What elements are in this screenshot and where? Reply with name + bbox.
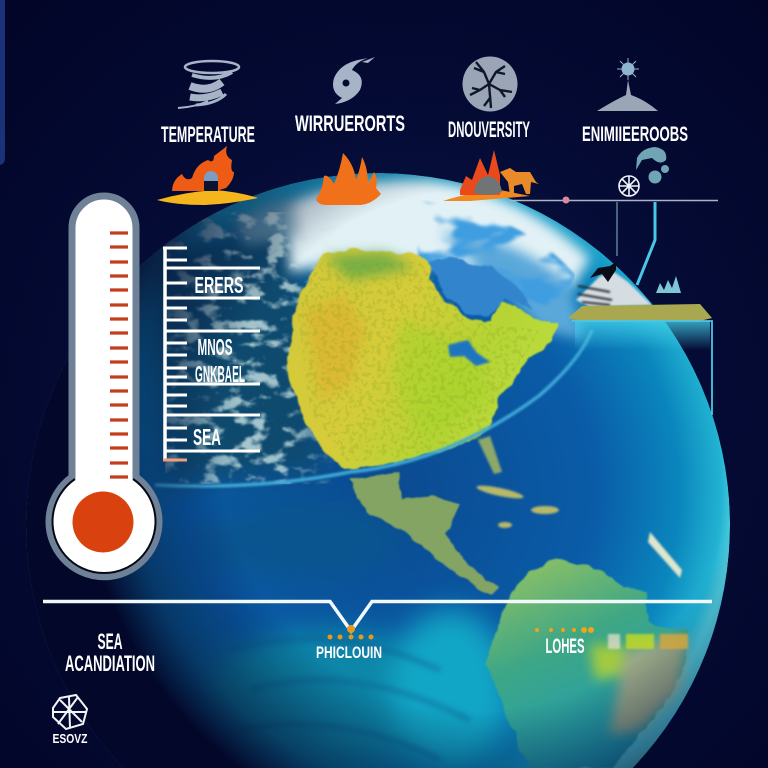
animal silhouette (590, 262, 616, 282)
icon: hurricane (333, 57, 375, 104)
Great Lakes (448, 340, 490, 366)
label: phenomena: PHICLOUIN (316, 643, 382, 662)
south america marker dots (535, 627, 594, 633)
label: errors: ERERS (194, 272, 244, 298)
corner tab (0, 0, 5, 165)
ocean swirl (259, 638, 471, 761)
label: sea: SEA (193, 424, 221, 450)
icon: tornado (178, 61, 239, 108)
cloud texture (165, 212, 340, 484)
bottom labels (65, 625, 688, 676)
notch marker dots (328, 625, 374, 640)
scale ruler: GNKBAEL (195, 361, 245, 387)
label: lowes: LOHES (546, 635, 584, 658)
label: biodiversity: DNOUVERSITY (448, 117, 530, 142)
label: environment: ENIMIIEEROOBS (582, 123, 688, 146)
Hudson Bay (428, 256, 532, 318)
snowy peak (576, 272, 652, 307)
mountain plateau (568, 262, 712, 415)
icon: geodesic emblem (53, 695, 87, 729)
thermometer ticks (110, 233, 128, 477)
label: mass: MNOS (198, 334, 232, 360)
shaded limb (0, 170, 768, 768)
icon: flame on island 1 (157, 146, 258, 205)
South America (487, 558, 688, 768)
color swatches (608, 634, 688, 649)
North America (286, 248, 558, 470)
connector lines (510, 196, 718, 285)
baseline divider with notch (43, 602, 712, 631)
Brazilian highlands (590, 634, 688, 735)
Central America (348, 470, 498, 595)
top row icons and labels (161, 56, 688, 147)
icon: cracked biodiversity disc (462, 56, 518, 112)
icon: volcano with spark (597, 58, 658, 111)
globe (0, 170, 768, 768)
cloud streak (648, 532, 682, 578)
Florida (478, 436, 502, 474)
scale ruler (163, 247, 260, 461)
land speckle (296, 262, 540, 462)
terrain shading (305, 252, 490, 440)
label: sea acidification: SEA (98, 629, 123, 654)
label: temperature: TEMPERATURE (161, 122, 255, 147)
icon: flame 2 (316, 153, 381, 205)
water glow beneath plateau (575, 321, 710, 350)
logo (52, 695, 88, 746)
label: weather events: WIRRUERORTS (295, 111, 405, 136)
thermometer bulb (72, 492, 134, 552)
polar ice (235, 180, 590, 340)
cloud deck base (150, 210, 325, 484)
ruler ticks (163, 248, 260, 451)
water column outline (572, 321, 712, 415)
label: acidification second line: ACANDIATION (65, 651, 155, 676)
ruler base tick (163, 458, 187, 462)
small plants (656, 276, 681, 293)
Caribbean islands (476, 483, 559, 528)
ruler spine (163, 247, 167, 461)
teal southern water (200, 500, 510, 768)
rock streaks (578, 286, 612, 305)
ocean (26, 173, 730, 768)
icon: fire and animal (443, 150, 539, 201)
thermometer case (49, 196, 159, 577)
thermometer (49, 196, 159, 577)
icon: water droplets and cogs (619, 147, 669, 196)
polar blue patches (410, 200, 575, 310)
horizon line (155, 330, 592, 486)
plateau top (568, 304, 712, 321)
logo caption: ESOVZ (52, 731, 88, 746)
thermometer bulb outline (52, 479, 156, 573)
